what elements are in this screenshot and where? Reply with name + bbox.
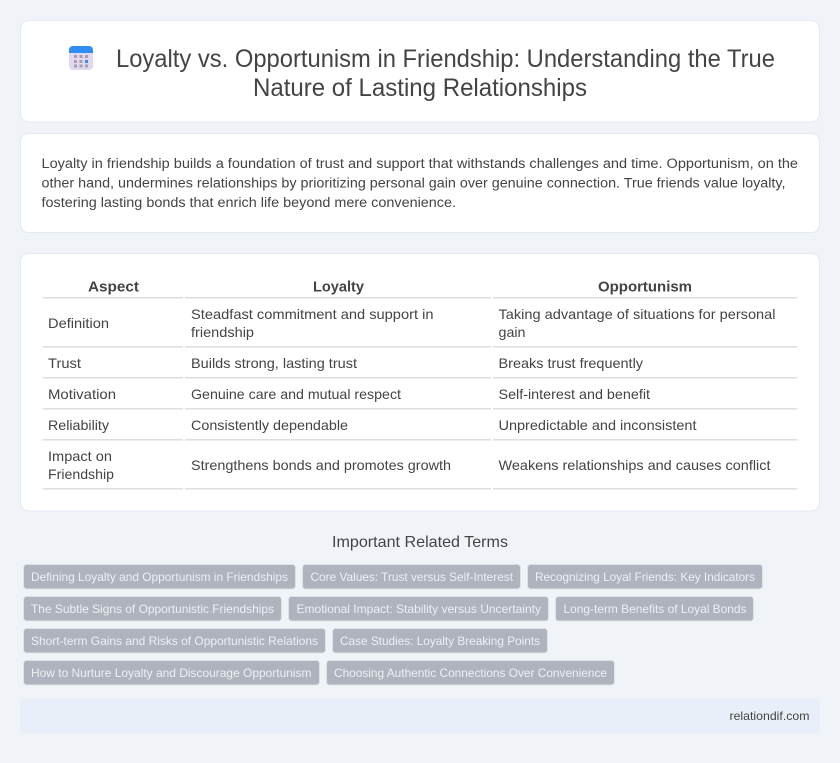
table header row (88, 278, 692, 296)
title: Nature of Lasting Relationships (253, 74, 587, 102)
tag: subtle signs: The Subtle Signs of Opportunistic Friendships (31, 602, 274, 616)
row: definition: gain (498, 324, 526, 340)
row: motivation: Self-interest and benefit (498, 386, 650, 402)
intro panel (20, 134, 820, 232)
row: impact on friendship: Weakens relationships and causes conflict (498, 457, 771, 473)
related terms heading: Important Related Terms (332, 534, 508, 551)
tag: how to nurture (24, 660, 320, 685)
tag: long-term benefits (556, 596, 754, 621)
row: motivation: Genuine care and mutual respect (191, 386, 401, 402)
row: reliability (48, 417, 697, 433)
tag: defining loyalty (24, 564, 296, 589)
table header row: Opportunism (598, 278, 692, 296)
table rules (43, 297, 797, 490)
tag: core values (302, 564, 520, 589)
intro text: Loyalty in friendship builds a foundation of trust and support that withstands challenges and time. Opportunism, on the (42, 156, 798, 172)
tag: core values: Core Values: Trust versus Self-Interest (310, 570, 514, 584)
row: motivation (48, 386, 650, 402)
row: trust: Breaks trust frequently (498, 355, 643, 371)
title (116, 45, 775, 102)
table header row: Loyalty (313, 278, 365, 296)
row: reliability: Reliability (48, 417, 109, 433)
table header row: Aspect (88, 278, 139, 296)
comparison table panel (20, 254, 820, 511)
footer: relationdif.com (730, 709, 810, 723)
tag: choosing authentic connections: Choosing Authentic Connections Over Convenience (334, 666, 607, 680)
row: impact on friendship: Friendship (48, 466, 114, 482)
tag: choosing authentic connections (326, 660, 614, 685)
title: Loyalty vs. Opportunism in Friendship: Understanding the True (116, 45, 775, 73)
icon: calendar (69, 46, 93, 70)
tag: how to nurture: How to Nurture Loyalty and Discourage Opportunism (31, 666, 312, 680)
tag: subtle signs (24, 596, 282, 621)
tag: recognizing loyal friends: Recognizing Loyal Friends: Key Indicators (535, 570, 755, 584)
tag: case studies: Case Studies: Loyalty Breaking Points (340, 634, 540, 648)
tag: short-term gains: Short-term Gains and Risks of Opportunistic Relations (31, 634, 318, 648)
tag: recognizing loyal friends (528, 564, 762, 589)
row: definition: friendship (191, 324, 254, 340)
row: trust (48, 355, 643, 371)
row: trust: Trust (48, 355, 81, 371)
row: definition (48, 306, 776, 340)
related term tags (24, 564, 762, 685)
tag: long-term benefits: Long-term Benefits of Loyal Bonds (564, 602, 746, 616)
row: impact on friendship (48, 448, 771, 482)
footer (20, 699, 820, 733)
intro text: other hand, undermines relationships by prioritizing personal gain over genuine connection. True friends value loyalty, (42, 176, 786, 192)
row: trust: Builds strong, lasting trust (191, 355, 357, 371)
intro text (42, 156, 798, 211)
row: definition: Steadfast commitment and support in (191, 306, 434, 322)
row: impact on friendship: Impact on (48, 448, 112, 464)
tag: emotional impact (288, 596, 548, 621)
tag: emotional impact: Emotional Impact: Stability versus Uncertainty (296, 602, 541, 616)
header panel (20, 20, 820, 122)
row: reliability: Consistently dependable (191, 417, 348, 433)
intro text: fostering lasting bonds that enrich life beyond mere convenience. (42, 195, 456, 211)
tag: defining loyalty: Defining Loyalty and Opportunism in Friendships (31, 570, 288, 584)
row: reliability: Unpredictable and inconsistent (498, 417, 697, 433)
row: motivation: Motivation (48, 386, 116, 402)
tag: short-term gains (24, 628, 326, 653)
row: definition: Taking advantage of situations for personal (498, 306, 776, 322)
tag: case studies (332, 628, 548, 653)
row: impact on friendship: Strengthens bonds and promotes growth (191, 457, 451, 473)
row: definition: Definition (48, 315, 109, 331)
